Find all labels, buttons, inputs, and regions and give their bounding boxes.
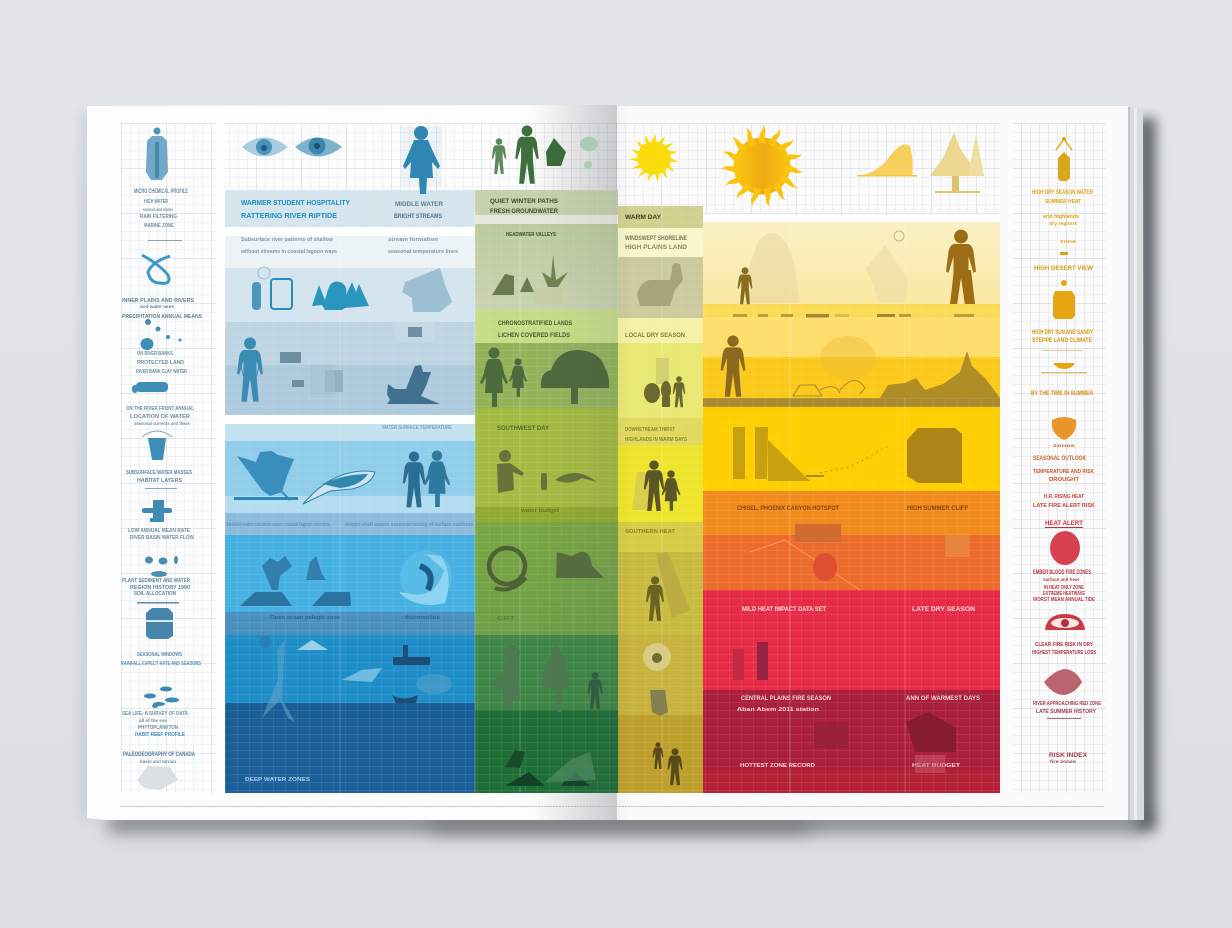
footer rule <box>121 806 1105 808</box>
heading: green band: HEADWATER VALLEYS <box>506 232 556 238</box>
icon row: plants and stones <box>492 255 568 304</box>
text block: left margin 1: MICRO CHEMICAL PROFILE <box>134 189 188 195</box>
text block: right margin orange-red: DROUGHT <box>1049 477 1079 483</box>
icon row: ring and hill <box>489 548 604 590</box>
icon: group of figures <box>644 358 685 407</box>
text block: dark red band: Aban Abem 2011 station <box>737 707 820 713</box>
text block: yellow label: DOWNSTREAM THIRST <box>625 427 676 433</box>
text block: darker blue band: Open ocean pelagic zone <box>270 615 340 621</box>
text block: left margin 3: RIVER BANK CLAY WATER <box>136 369 187 375</box>
text block: yellow label: HIGHLANDS IN WARM DAYS <box>625 437 687 443</box>
text block: left margin 7: SOIL ALLOCATION <box>134 591 176 597</box>
icon: hanger bottle <box>1056 137 1072 181</box>
icon: scattered blobs <box>140 319 182 350</box>
icon: two runners <box>653 742 682 785</box>
icon: box <box>146 608 173 639</box>
text block: red band: LATE DRY SEASON <box>912 607 975 613</box>
text block: dark red band: ANN OF WARMEST DAYS <box>906 696 980 702</box>
icon row: saluting figure and landscape <box>721 336 1000 398</box>
text block: orange band <box>737 506 968 512</box>
text block: left margin 6: RIVER BASIN WATER FLOW <box>130 535 195 541</box>
icon: fish shoal <box>144 686 179 708</box>
panel: top grid strip <box>225 123 1000 223</box>
text: lower yellow label: SOUTHERN HEAT <box>625 529 676 535</box>
icon: pair of figures <box>632 460 681 511</box>
text block: right margin bottom: LATE SUMMER HISTORY <box>1036 709 1096 715</box>
text block: right margin red: IN HEAT ONLY ZONE <box>1044 585 1085 591</box>
text block: left margin 1: HIGH WATER <box>144 199 168 205</box>
page gutter shading on paper <box>530 105 617 820</box>
text block: right margin bottom <box>1033 701 1101 764</box>
icon: capsule car <box>132 382 168 393</box>
heading: blue band: BRIGHT STREAMS <box>394 213 443 220</box>
icon: dune and tree <box>857 132 984 193</box>
text block: mid blue band <box>226 522 473 528</box>
text block: dark red band: CENTRAL PLAINS FIRE SEASON <box>741 696 831 702</box>
text: green label small: CRT <box>497 616 516 622</box>
text block: left margin 9: HABIT REEF PROFILE <box>135 732 186 738</box>
icon row: figure and equipment <box>237 322 440 404</box>
panel: left margin icons and text <box>121 128 202 790</box>
text block: left margin 4: LOCATION OF WATER <box>130 414 190 420</box>
text block: right margin yellow: HIGH DRY SEASON WATER <box>1032 190 1094 196</box>
panel: right margin grid <box>1013 123 1106 793</box>
icon: dish <box>1053 363 1075 369</box>
text block: mid blue band: deeper shelf waters seasonal mixing of surface nutrients <box>345 522 473 528</box>
icons: green top figures <box>492 125 598 184</box>
panel: left margin grid <box>121 123 216 793</box>
text block: right margin orange-red: HEAT ALERT <box>1045 521 1083 527</box>
heading: blue band <box>241 198 443 220</box>
text block: left margin 1: RAIN FILTERING <box>140 214 177 220</box>
icon: lips <box>1044 669 1082 695</box>
icon row: islands and shell <box>240 551 452 606</box>
text block: right margin orange-red: LATE FIRE ALERT RISK <box>1033 503 1095 509</box>
text block: right margin red: surface and heat <box>1043 577 1080 582</box>
text block: left margin 5: SUBSURFACE WATER MASSES <box>126 470 192 476</box>
text block: right margin orange-red: SEASONAL OUTLOOK <box>1033 455 1086 462</box>
text block: left margin 9: PALEOGEOGRAPHY OF CANADA <box>123 752 195 758</box>
heading: green band: QUIET WINTER PATHS <box>490 198 559 205</box>
text block: left margin 6: LOW ANNUAL MEAN RATE <box>128 528 190 534</box>
text block: left margin 3: ON RIVER BANKS <box>137 351 173 357</box>
icon: red ball <box>1050 531 1080 565</box>
text block: right margin amber <box>1032 330 1093 351</box>
text block: right margin amber: STEPPE LAND CLIMATE <box>1032 338 1092 344</box>
text block: left margin 4: ON THE RIVER FRONT ANNUAL <box>126 406 195 412</box>
icon: pebbles <box>145 556 178 577</box>
text block: blue intro <box>240 237 458 255</box>
text block: left margin 9: SEA LIFE: A SURVEY OF DATA <box>122 711 188 717</box>
icon row: seated figure and bird <box>497 450 597 493</box>
text: olive label: water budget <box>520 508 559 514</box>
icon: right eye <box>295 138 342 156</box>
text block: left margin 1: MARINE ZONE <box>144 223 174 229</box>
text block: blue intro: Subsurface river patterns of shallow <box>241 237 334 243</box>
text block: left margin 2 <box>122 298 202 320</box>
text block: right margin yellow: zone <box>1060 239 1077 244</box>
text block: left margin 2: and water uses <box>140 304 175 309</box>
text block: left margin 9: PHYTOPLANKTON <box>138 725 178 731</box>
icon: amber jar <box>1053 280 1075 319</box>
text block: right margin amber: HIGH DRY SUN AND SANDY <box>1032 330 1093 336</box>
icon: red eye <box>1045 614 1085 630</box>
icon: large sun <box>720 124 804 208</box>
text block: left margin 2: INNER PLAINS AND RIVERS <box>122 298 194 304</box>
text block: left margin 9: all of the sea <box>139 718 168 723</box>
text block: blue intro: without streams in coastal lagoon ways <box>240 249 337 255</box>
icon: ghost figure <box>643 643 671 716</box>
icon: bottle <box>146 128 168 180</box>
text block: right margin yellow: arid highlands <box>1043 214 1079 220</box>
icon: orange nut <box>1052 417 1076 440</box>
text block: left margin 8: RAINFALL EXPECT RATE AND SEASONS <box>121 661 201 667</box>
text block: green midband <box>498 320 573 339</box>
text block: right margin bottom: fire zones <box>1050 759 1077 764</box>
text block: right margin yellow: dry regions <box>1049 221 1078 226</box>
heading: blue band: MIDDLE WATER <box>395 201 443 208</box>
text block: green midband: CHRONOSTRATIFIED LANDS <box>498 320 573 327</box>
text block: green midband: LICHEN COVERED FIELDS <box>498 333 570 339</box>
legend: dashed bars <box>733 314 974 318</box>
text block: light blue band label: WATER SURFACE TEMPERATURE <box>382 425 452 431</box>
text block: left margin 3 <box>136 351 187 375</box>
text block: right margin red: EMBER BLOOD FIRE ZONES <box>1033 570 1091 576</box>
text block: right margin bottom: RISK INDEX <box>1049 753 1087 759</box>
heading: yellow band: WINDSWEPT SHORELINE <box>625 236 687 242</box>
icon row: shallow water creatures and figures <box>234 450 450 507</box>
text block: blue intro: seasonal temperature lines <box>388 249 458 255</box>
book gutter shading <box>540 106 631 820</box>
text block: orange band: HIGH SUMMER CLIFF <box>907 506 968 512</box>
text block: right margin yellow <box>1032 190 1094 272</box>
heading: yellow band: HIGH PLAINS LAND <box>625 245 688 251</box>
icon: plane <box>142 500 172 522</box>
text: deep blue caption: DEEP WATER ZONES <box>245 777 310 783</box>
text block: red band: MILD HEAT IMPACT DATA SET <box>742 607 826 613</box>
panel: warm spectrum column <box>703 214 1000 793</box>
icon row: mountains <box>505 750 596 786</box>
text block: orange band: CHISEL, PHOENIX CANYON HOTSPOT <box>737 506 839 512</box>
text block: left margin 7: PLANT SEDIMENT AND WATER <box>122 578 190 584</box>
text block: left margin 8: SEASONAL WINDOWS <box>137 652 182 658</box>
text block: right margin orange-red: TEMPERATURE AND RISK <box>1033 469 1094 475</box>
icon row: forest figures <box>490 645 602 712</box>
icon: pale map <box>137 766 178 790</box>
icon: walker and cone <box>646 552 690 621</box>
text block: left margin 8 <box>121 652 201 667</box>
heading: blue band: RATTERING RIVER RIPTIDE <box>241 211 337 220</box>
text block: left margin 7 <box>122 578 190 604</box>
text block: left margin 4: seasonal currents and flows <box>134 421 190 426</box>
page stack edge <box>1120 107 1144 820</box>
icon: cup <box>142 431 172 460</box>
text block: right margin bottom: RIVER APPROACHING RED ZONE <box>1033 701 1101 707</box>
book shadow <box>82 112 1156 833</box>
right page <box>617 106 1128 820</box>
heading: blue band: WARMER STUDENT HOSPITALITY <box>241 198 350 207</box>
text: green label: SOUTHWEST DAY <box>497 426 549 432</box>
icon row: dark red forms <box>814 712 956 773</box>
text: yellow label: LOCAL DRY SEASON <box>625 333 685 339</box>
text block: left margin 2: PRECIPITATION ANNUAL MEANS <box>122 314 202 320</box>
text block: dark red band <box>737 696 980 769</box>
text block: right margin orange-red: H.R. RISING HEAT <box>1044 494 1085 500</box>
text block: left margin 3: PROTECTED LAND <box>137 360 184 366</box>
text block: right margin yellow: SUMMER HEAT <box>1045 199 1082 205</box>
text block: right margin orange-red: zones <box>1053 443 1076 448</box>
heading: green band: FRESH GROUNDWATER <box>490 209 559 215</box>
icon row: capsule, frame, kettle, lungs <box>252 267 452 312</box>
panel: pale yellow column <box>618 206 703 793</box>
text block: right margin orange: BY THE TIME IN SUMMER <box>1031 391 1094 397</box>
icon: figure in coat <box>400 126 442 194</box>
text block: red band <box>742 607 975 613</box>
text block: right margin yellow: HIGH DESERT VIEW <box>1034 266 1093 272</box>
text block: mid blue band: Shallow water columns warm coastal lagoon currents <box>226 522 330 528</box>
text block: yellow label <box>625 427 687 443</box>
text block: right margin red <box>1033 570 1096 603</box>
text block: left margin 9 <box>122 711 195 764</box>
text block: left margin 9: basin and terrain <box>140 759 176 764</box>
text block: right margin crimson <box>1032 642 1096 656</box>
text block: dark red band: HEAT BUDGET <box>912 763 961 769</box>
text block: right margin orange-red <box>1033 443 1095 528</box>
text block: left margin 5: HABITAT LAYERS <box>137 478 183 484</box>
grid overlay on colour bands <box>225 190 1000 793</box>
icon: knot <box>142 255 170 283</box>
left page <box>87 105 617 820</box>
text block: darker blue band: thermocline <box>405 615 440 621</box>
panel: right margin icons and text <box>1031 137 1101 764</box>
text block: right margin orange <box>1031 372 1094 397</box>
icon row: sun zone sketches and figure <box>738 230 976 304</box>
text block: right margin red: WORST MEAN ANNUAL TIDE <box>1033 597 1096 603</box>
text block: left margin 4 <box>126 406 195 426</box>
heading: green band <box>490 198 559 238</box>
text block: left margin 1 <box>134 189 188 241</box>
heading: yellow band: WARM DAY <box>625 214 662 221</box>
panel: green column <box>475 190 618 793</box>
text block: darker blue band <box>270 615 440 621</box>
text block: blue intro: stream formation <box>388 237 439 243</box>
icon: left eye <box>242 138 288 156</box>
icon row: people and canopy tree <box>480 348 609 407</box>
icon row: ocean figure, ships, landscapes <box>259 636 452 722</box>
icon row: deep orange forms <box>750 524 970 590</box>
panel: blue column <box>225 190 475 793</box>
icon: small sun <box>629 133 679 183</box>
text block: left margin 1: sources and marks <box>143 207 173 212</box>
text block: left margin 7: REGION HISTORY 1990 <box>130 585 190 591</box>
icon: seated figure <box>637 263 683 306</box>
text block: left margin 6 <box>128 528 195 541</box>
text block: right margin crimson: HIGHEST TEMPERATURE LOSS <box>1032 650 1096 656</box>
text block: dark red band: HOTTEST ZONE RECORD <box>740 763 815 769</box>
icon: red bars <box>733 642 768 680</box>
heading: yellow band <box>625 214 688 251</box>
text block: right margin crimson: CLEAR FIRE RISK IN DRY <box>1035 642 1093 648</box>
icon row: banners and jar <box>733 427 962 483</box>
text block: right margin red: EXTREME HEATWAVE <box>1043 591 1086 597</box>
text block: left margin 5 <box>126 470 192 489</box>
